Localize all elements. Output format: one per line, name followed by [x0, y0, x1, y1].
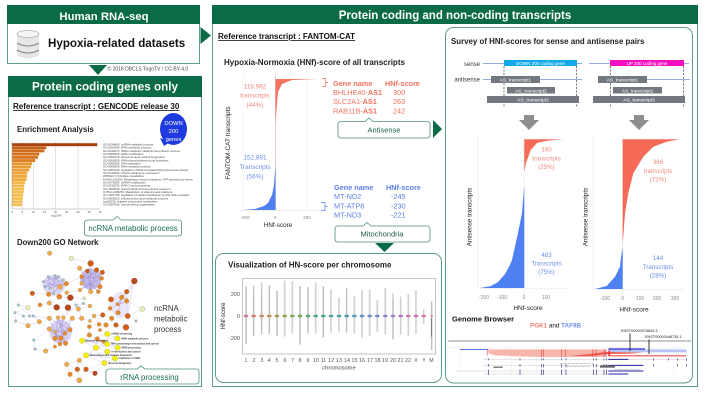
- chart: down 200 antisense scores: -100: [497, 295, 507, 301]
- transcript labels: [621, 329, 682, 354]
- transcript labels: ENST00000376840.3: [621, 329, 658, 333]
- callout: down 200 genes: [160, 113, 187, 146]
- network graph: ribosome biogenesis: [85, 340, 109, 342]
- chart: down 200 antisense scores: (75%): [538, 269, 555, 276]
- chart: up 200 antisense scores: HNf-score: [619, 306, 649, 314]
- chart: down 200 antisense scores: HNf-score: [513, 305, 543, 312]
- bar chart: enrichment: GO:0000028: rRNA phosphodiester bond hydrolysis: [103, 158, 169, 162]
- chart: up 200 antisense scores: 366: [653, 159, 664, 166]
- arrow: left grey down: [519, 115, 539, 130]
- chart: violin per chromosome: 10: [313, 358, 319, 364]
- bar chart: enrichment: [11, 141, 193, 218]
- chart: up 200 antisense scores: 100: [636, 296, 644, 302]
- network graph: ncRNA processing: [111, 333, 133, 336]
- table: mitochondria top genes: -245: [391, 192, 406, 201]
- chart: violin per chromosome: 5: [276, 358, 279, 364]
- chart: HNf-score of all transcripts: HNf-score: [264, 222, 293, 229]
- bar chart: enrichment: GO:2000142: regulation of DNA-templated DNA polymerase activity: [103, 168, 189, 172]
- chart: violin per chromosome: HNf-score: [221, 302, 227, 330]
- bar chart: enrichment: 5: [22, 210, 24, 214]
- panel: protein coding genes only: Protein coding genes only: [32, 80, 179, 94]
- chart: violin per chromosome: 15: [352, 358, 357, 364]
- heading: genome browser: Genome Browser: [452, 314, 514, 324]
- bar chart: enrichment: GO:0007005: mitochondrion organization: [103, 203, 155, 207]
- diagram: up 200 gene model: AS_transcript3: [623, 98, 655, 104]
- bar chart: enrichment: GO:0006259: DNA metabolic process: [103, 165, 151, 169]
- chart: violin per chromosome: 17: [367, 358, 373, 364]
- diagram: down 200 gene model: AS_transcript3: [517, 98, 549, 104]
- table: antisense top genes: 242: [393, 106, 405, 116]
- chart: down 200 antisense scores: 160: [541, 146, 552, 154]
- bar chart: enrichment: GO:0034660: ncRNA metabolic process: [103, 142, 154, 146]
- copyright note: © 2016 DBCLS TogoTV / CC-BY-4.0: [108, 66, 188, 72]
- bar chart: enrichment: GO:0016072: rRNA metabolic/ catabolic biosynthetic process: [103, 149, 181, 153]
- diagram: up 200 gene model: UP 200 coding gene: [627, 61, 668, 66]
- chart: up 200 antisense scores: 0: [621, 296, 624, 302]
- callout: antisense: Antisense: [368, 126, 400, 134]
- panel: protein coding and non-coding transcripts: [212, 5, 698, 386]
- genome browser tracks: [448, 340, 691, 375]
- chart: violin per chromosome: chromosome: [322, 366, 356, 372]
- panel: protein coding genes only: [8, 76, 202, 386]
- arrow: right to transcript panel: [200, 27, 211, 44]
- arrow: to survey panel: [433, 120, 442, 138]
- chart: violin per chromosome: -200: [229, 336, 240, 342]
- table: antisense top genes: BHLHE40-AS1: [333, 88, 382, 97]
- transcript labels: ENST00000448735.1: [645, 335, 682, 339]
- panel: Human RNA-seq: [7, 5, 200, 64]
- bar chart: enrichment: 10: [32, 210, 35, 214]
- chart: violin per chromosome: 7: [291, 358, 294, 364]
- chart: violin per chromosome: 19: [382, 358, 388, 364]
- panel: survey of HNf-scores: [446, 28, 692, 383]
- table: mitochondria top genes: HNf-score: [386, 183, 421, 192]
- chart: HNf-score of all transcripts: Transcripts: [239, 164, 271, 171]
- bar chart: enrichment: GO:0140053: mitochondrial gene expression: [103, 171, 160, 175]
- chart: HNf-score of all transcripts: FANTOM-CAT transcripts: [225, 106, 232, 180]
- panel: survey of HNf-scores: Survey of HNf-scores for sense and antisense pairs: [451, 37, 645, 46]
- chart: HNf-score of all transcripts: -250: [240, 215, 250, 220]
- chart: violin per chromosome: 20: [390, 358, 396, 364]
- chart: violin per chromosome: 9: [307, 358, 310, 364]
- bar chart: enrichment: 30: [76, 210, 80, 214]
- chart: up 200 antisense scores: (28%): [650, 272, 666, 280]
- bar chart: enrichment: GO:0006520: cellular amino acid metabolic process: [103, 196, 169, 200]
- diagram: down 200 gene model: [454, 60, 582, 107]
- reference transcript: Reference transcript : GENCODE release 30: [13, 102, 180, 111]
- chart: up 200 antisense scores: transcripts: [644, 168, 672, 175]
- bar chart: enrichment: GO:0006400: tRNA modification: [103, 152, 144, 156]
- panel: HN-score per chromosome: [216, 254, 442, 382]
- chart: down 200 antisense scores: 100: [542, 295, 550, 301]
- chart: violin per chromosome: [221, 278, 436, 372]
- table: mitochondria top genes: -230: [391, 202, 406, 210]
- heading: enrichment analysis: Enrichment Analysis: [17, 125, 95, 134]
- chart: down 200 antisense scores: transcripts: [532, 156, 561, 162]
- chart: violin per chromosome: 21: [398, 358, 403, 364]
- network graph: RNA processing in the nucleus and cytosol: [111, 343, 159, 346]
- icon: database: [17, 30, 39, 58]
- callout: rRNA processing: [106, 366, 199, 384]
- chart: down 200 antisense scores: 0: [523, 295, 526, 301]
- chart: HNf-score of all transcripts: (56%): [246, 174, 264, 180]
- chart: up 200 antisense scores: -100: [600, 296, 610, 302]
- bar chart: enrichment: GO:0000470: ribosomal large subunit biogenesis: [103, 155, 165, 159]
- chart: down 200 antisense scores: Transcripts: [531, 260, 562, 268]
- chart: up 200 antisense scores: Antisense transcripts: [582, 188, 590, 246]
- chart: HNf-score of all transcripts: [225, 75, 320, 229]
- callout: down 200 genes: genes: [166, 137, 181, 143]
- network graph: ribosome biogenesis: [108, 363, 132, 365]
- chart: HNf-score of all transcripts: 119,962: [244, 84, 267, 90]
- callout: ncRNA metabolic process: [84, 216, 182, 236]
- arrow: to chromosome panel: [375, 243, 394, 252]
- bar chart: enrichment: 35: [87, 210, 91, 214]
- diagram: down 200 gene model: AS_transcript2: [515, 88, 547, 94]
- chart: down 200 antisense scores: [466, 135, 566, 312]
- chart: violin per chromosome: 18: [375, 358, 380, 364]
- chart: up 200 antisense scores: 300: [671, 296, 679, 302]
- chart: up 200 antisense scores: [582, 135, 684, 314]
- table: antisense top genes: RAB11B-AS1: [333, 106, 377, 116]
- chart: violin per chromosome: Y: [422, 358, 426, 364]
- network graph: maturation of rRNA: [119, 357, 140, 360]
- label: ncRNA metabolic process: process: [154, 325, 181, 334]
- chart: violin per chromosome: 4: [268, 358, 271, 364]
- callout: rRNA processing: rRNA processing: [120, 373, 179, 382]
- diagram: down 200 gene model: antisense: [454, 78, 481, 84]
- table: mitochondria top genes: MT-ATP8: [334, 202, 364, 210]
- bar chart: enrichment: 15: [43, 210, 46, 214]
- bar chart: enrichment: -log10(P): [50, 214, 62, 218]
- chart: violin per chromosome: 0: [237, 314, 240, 320]
- chart: violin per chromosome: 8: [299, 358, 302, 364]
- bar chart: enrichment: 20: [54, 210, 57, 214]
- bar chart: enrichment: hsa00230: Arginine and proline metabolism: [103, 200, 158, 204]
- chart: up 200 antisense scores: 144: [653, 255, 664, 262]
- chart: violin per chromosome: 13: [336, 358, 342, 364]
- chart: violin per chromosome: 16: [359, 358, 365, 364]
- arrow: right grey down: [629, 115, 649, 130]
- callout: mitochondria: [335, 222, 430, 242]
- table: antisense top genes: 263: [393, 97, 405, 106]
- chart: up 200 antisense scores: 200: [653, 296, 661, 302]
- bar chart: enrichment: 40: [98, 210, 102, 214]
- callout: ncRNA metabolic process: ncRNA metabolic process: [88, 224, 178, 233]
- bar chart: enrichment: GO:0072594: ncRNA modification: [103, 180, 146, 184]
- chart: down 200 antisense scores: 483: [541, 252, 552, 259]
- chart: violin per chromosome: 1: [245, 358, 248, 364]
- diagram: down 200 gene model: AS_transcript1: [500, 78, 532, 84]
- diagram: up 200 gene model: AS_transcript2: [622, 88, 654, 94]
- reference transcript: Reference transcript : FANTOM-CAT: [218, 32, 355, 41]
- bar chart: enrichment: R-HSA-1280215: Metabolism of vitamins and cofactors: [103, 190, 173, 194]
- table: antisense top genes: Gene name: [333, 79, 372, 88]
- callout: mitochondria: Mitochondria: [361, 230, 404, 238]
- table: mitochondria top genes: [321, 183, 421, 220]
- heading: HNf-score of all transcripts: Hypoxia-Normoxia (HNf)-score of all transcripts: [224, 58, 405, 67]
- table: mitochondria top genes: -221: [391, 210, 406, 220]
- diagram: down 200 gene model: sense: [464, 62, 481, 68]
- panel: Human RNA-seq: Hypoxia-related datasets: [48, 37, 185, 50]
- table: mitochondria top genes: MT-ND2: [334, 192, 361, 201]
- chart: HNf-score of all transcripts: (44%): [246, 102, 264, 109]
- diagram: up 200 gene model: [589, 60, 690, 107]
- table: antisense top genes: [322, 78, 420, 116]
- network graph: tRNA metabolic process: [121, 337, 149, 340]
- label: ncRNA metabolic process: metabolic: [154, 314, 187, 324]
- bar chart: enrichment: GO:0016233: tRNA 3-end processing: [103, 184, 151, 188]
- chart: violin per chromosome: 12: [328, 358, 334, 364]
- diagram: up 200 gene model: AS_transcript1: [607, 78, 639, 84]
- chart: violin per chromosome: 2: [253, 358, 256, 364]
- arrow: down to protein coding panel: [89, 65, 107, 75]
- heading: down200 go network: Down200 GO Network: [17, 238, 99, 247]
- network graph: in the nucleus and cytosol: [111, 350, 141, 353]
- table: antisense top genes: SLC2A1-AS1: [333, 97, 377, 106]
- chart: HNf-score of all transcripts: 0: [274, 215, 277, 220]
- chart: violin per chromosome: 11: [321, 358, 326, 364]
- bar chart: enrichment: WP4022: Pyrimidine metabolism: [103, 174, 145, 178]
- network graph: ribonucleoprotein complex biogenesis: [89, 354, 133, 357]
- chart: up 200 antisense scores: (72%): [650, 176, 666, 184]
- bar chart: enrichment: 0: [11, 210, 13, 214]
- bar chart: enrichment: GO:1990542: mitochondrial transmembrane transport: [103, 187, 171, 191]
- bar chart: enrichment: GO:0006260: DNA replication: [103, 162, 141, 166]
- panel: Human RNA-seq: Human RNA-seq: [59, 11, 149, 23]
- bar chart: enrichment: 25: [65, 210, 68, 214]
- chart: down 200 antisense scores: (25%): [538, 164, 555, 171]
- bar chart: enrichment: R-HSA-163200: Respiratory electron transport, ATP synthesis by chemi: [103, 177, 193, 181]
- chart: violin per chromosome: X: [414, 358, 418, 364]
- chart: down 200 antisense scores: Antisense transcripts: [466, 188, 474, 246]
- chart: violin per chromosome: 22: [405, 358, 411, 364]
- chart: violin per chromosome: M: [429, 358, 434, 364]
- diagram: down 200 gene model: DOWN 200 coding gene: [516, 61, 565, 66]
- panel: protein coding and non-coding transcripts: Protein coding and non-coding transcripts: [339, 10, 571, 22]
- panel: HN-score per chromosome: Visualization of HN-score per chromosome: [228, 260, 392, 270]
- bar chart: enrichment: GO:1901796: regulation of signal transduction by p53 class mediator: [103, 193, 190, 197]
- chart: violin per chromosome: 200: [231, 292, 240, 298]
- label: ncRNA metabolic process: ncRNA: [154, 304, 179, 313]
- callout: antisense: [338, 118, 430, 138]
- chart: HNf-score of all transcripts: 152,891: [243, 154, 267, 162]
- chart: HNf-score of all transcripts: transcripts: [240, 92, 270, 100]
- bar chart: enrichment: GO:0006399: tRNA metabolic process: [103, 146, 152, 150]
- table: mitochondria top genes: MT-ND3: [334, 210, 361, 220]
- callout: down 200 genes: 200: [169, 129, 178, 135]
- chart: violin per chromosome: 3: [261, 358, 264, 364]
- table: mitochondria top genes: Gene name: [334, 183, 373, 192]
- network graph: rRNA processing: [122, 347, 141, 350]
- chart: up 200 antisense scores: Transcripts: [643, 264, 673, 271]
- table: antisense top genes: 300: [393, 88, 405, 97]
- network graph: [14, 249, 159, 383]
- chart: violin per chromosome: 6: [284, 358, 287, 364]
- genes: PGK1 and TAF9B: PGK1 and TAF9B: [530, 322, 581, 330]
- callout: down 200 genes: DOWN: [164, 121, 183, 127]
- chart: down 200 antisense scores: -200: [479, 295, 489, 301]
- chart: HNf-score of all transcripts: 250: [303, 215, 311, 220]
- table: antisense top genes: HNf-score: [385, 79, 420, 88]
- chart: violin per chromosome: 14: [344, 358, 350, 364]
